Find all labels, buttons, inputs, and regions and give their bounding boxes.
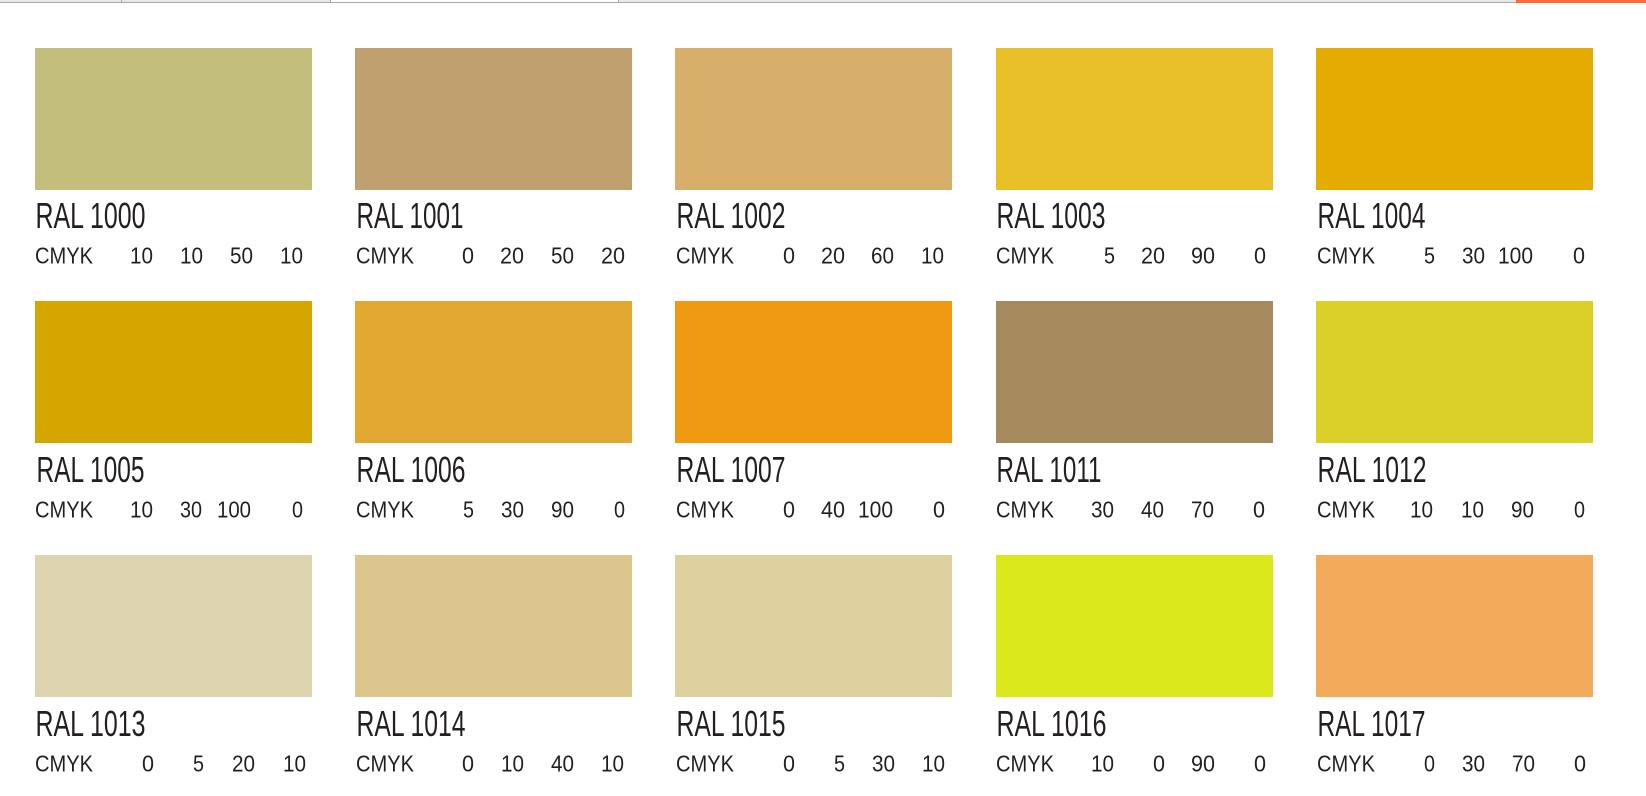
swatch: RAL 1014	[355, 555, 632, 697]
swatch: RAL 1003	[996, 48, 1273, 190]
CMYK values: RAL 1014: CMYK	[356, 751, 414, 777]
swatch: RAL 1011	[996, 301, 1273, 443]
panel: RAL 1004	[1316, 48, 1593, 269]
name: RAL 1006: RAL 1006	[356, 449, 466, 490]
CMYK values: RAL 1012: 0	[1574, 497, 1585, 523]
CMYK values: RAL 1006	[356, 497, 625, 523]
CMYK values: RAL 1006: 5	[463, 497, 474, 523]
CMYK values: RAL 1005: CMYK	[35, 497, 93, 523]
CMYK values: RAL 1011: 70	[1191, 497, 1214, 523]
CMYK values: RAL 1007: 0	[933, 497, 945, 523]
CMYK values: RAL 1012: 90	[1511, 497, 1534, 523]
CMYK values: RAL 1000: 10	[130, 243, 153, 269]
name: RAL 1000: RAL 1000	[36, 195, 146, 236]
CMYK values: RAL 1006: 0	[614, 497, 625, 523]
CMYK values: RAL 1003: 5	[1104, 243, 1115, 269]
CMYK values: RAL 1000: CMYK	[35, 243, 93, 269]
CMYK values: RAL 1006: CMYK	[356, 497, 414, 523]
CMYK values: RAL 1015: 5	[834, 751, 845, 777]
name: RAL 1016: RAL 1016	[996, 703, 1106, 744]
CMYK values: RAL 1017: CMYK	[1317, 751, 1375, 777]
CMYK values: RAL 1001: 0	[462, 243, 474, 269]
name: RAL 1004: RAL 1004	[1318, 195, 1426, 236]
panel: RAL 1006	[355, 301, 632, 523]
swatch: RAL 1017	[1316, 555, 1593, 697]
CMYK values: RAL 1003: 90	[1191, 243, 1215, 269]
panel: RAL 1015	[675, 555, 952, 777]
CMYK values: RAL 1002: 20	[821, 243, 845, 269]
CMYK values: RAL 1007: 0	[783, 497, 795, 523]
panel: RAL 1000	[35, 48, 312, 269]
name: RAL 1002: RAL 1002	[676, 195, 786, 236]
CMYK values: RAL 1011: CMYK	[996, 497, 1054, 523]
panel: RAL 1001	[355, 48, 632, 269]
CMYK values: RAL 1001: CMYK	[356, 243, 414, 269]
name: RAL 1007: RAL 1007	[676, 449, 786, 490]
CMYK values: RAL 1007: 40	[821, 497, 845, 523]
CMYK values: RAL 1007: 100	[858, 497, 893, 523]
CMYK values: RAL 1012: CMYK	[1317, 497, 1375, 523]
CMYK values: RAL 1016: 0	[1254, 751, 1266, 777]
swatch: RAL 1000	[35, 48, 312, 190]
swatch: RAL 1015	[675, 555, 952, 697]
CMYK values: RAL 1003	[996, 243, 1266, 269]
name: RAL 1003: RAL 1003	[996, 195, 1106, 236]
CMYK values: RAL 1017: 70	[1512, 751, 1535, 777]
CMYK values: RAL 1007	[676, 497, 945, 523]
CMYK values: RAL 1006: 30	[501, 497, 524, 523]
swatch: RAL 1005	[35, 301, 312, 443]
CMYK values: RAL 1000: 10	[280, 243, 303, 269]
CMYK values: RAL 1014: 0	[462, 751, 474, 777]
panel: RAL 1003	[996, 48, 1273, 269]
CMYK values: RAL 1002: 10	[921, 243, 944, 269]
CMYK values: RAL 1015: 0	[783, 751, 795, 777]
swatch: RAL 1013	[35, 555, 312, 697]
panel: RAL 1012	[1316, 301, 1593, 523]
CMYK values: RAL 1002: CMYK	[676, 243, 734, 269]
CMYK values: RAL 1011	[996, 497, 1265, 523]
CMYK values: RAL 1005: 100	[217, 497, 251, 523]
panel: RAL 1002	[675, 48, 952, 269]
CMYK values: RAL 1004	[1317, 243, 1585, 269]
CMYK values: RAL 1004: 30	[1462, 243, 1485, 269]
CMYK values: RAL 1003: 20	[1141, 243, 1165, 269]
CMYK values: RAL 1013: 20	[232, 751, 255, 777]
name: RAL 1013: RAL 1013	[36, 703, 146, 744]
CMYK values: RAL 1013: 10	[283, 751, 306, 777]
CMYK values: RAL 1003: CMYK	[996, 243, 1054, 269]
swatch: RAL 1001	[355, 48, 632, 190]
name: RAL 1014: RAL 1014	[356, 703, 466, 744]
panel: RAL 1017	[1316, 555, 1593, 777]
CMYK values: RAL 1015	[676, 751, 945, 777]
CMYK values: RAL 1013: CMYK	[35, 751, 93, 777]
CMYK values: RAL 1004: 100	[1498, 243, 1533, 269]
CMYK values: RAL 1016: 10	[1091, 751, 1114, 777]
CMYK values: RAL 1014: 10	[501, 751, 524, 777]
CMYK values: RAL 1017: 0	[1424, 751, 1435, 777]
name: RAL 1012: RAL 1012	[1318, 449, 1426, 490]
panel: RAL 1016	[996, 555, 1273, 777]
name: RAL 1011: RAL 1011	[996, 449, 1102, 490]
CMYK values: RAL 1004: CMYK	[1317, 243, 1375, 269]
CMYK values: RAL 1016	[996, 751, 1266, 777]
CMYK values: RAL 1017	[1317, 751, 1586, 777]
CMYK values: RAL 1017: 30	[1462, 751, 1485, 777]
CMYK values: RAL 1004: 0	[1573, 243, 1585, 269]
CMYK values: RAL 1005: 10	[130, 497, 153, 523]
CMYK values: RAL 1000: 10	[180, 243, 203, 269]
CMYK values: RAL 1012: 10	[1410, 497, 1433, 523]
CMYK values: RAL 1005	[35, 497, 303, 523]
name: RAL 1017: RAL 1017	[1318, 703, 1426, 744]
swatch: RAL 1002	[675, 48, 952, 190]
browser tab strip	[0, 0, 1646, 3]
CMYK values: RAL 1001: 50	[551, 243, 574, 269]
swatch: RAL 1012	[1316, 301, 1593, 443]
CMYK values: RAL 1012: 10	[1461, 497, 1484, 523]
CMYK values: RAL 1002: 0	[783, 243, 795, 269]
name: RAL 1015: RAL 1015	[676, 703, 786, 744]
CMYK values: RAL 1006: 90	[551, 497, 574, 523]
CMYK values: RAL 1014	[356, 751, 624, 777]
CMYK values: RAL 1011: 40	[1141, 497, 1164, 523]
CMYK values: RAL 1005: 0	[292, 497, 303, 523]
CMYK values: RAL 1013: 0	[142, 751, 154, 777]
CMYK values: RAL 1001: 20	[500, 243, 524, 269]
swatch: RAL 1007	[675, 301, 952, 443]
CMYK values: RAL 1000	[35, 243, 303, 269]
CMYK values: RAL 1015: 30	[872, 751, 895, 777]
CMYK values: RAL 1016: 90	[1191, 751, 1215, 777]
panel: RAL 1007	[675, 301, 952, 523]
CMYK values: RAL 1017: 0	[1574, 751, 1586, 777]
CMYK values: RAL 1002	[676, 243, 944, 269]
CMYK values: RAL 1007: CMYK	[676, 497, 734, 523]
swatch: RAL 1016	[996, 555, 1273, 697]
name: RAL 1001: RAL 1001	[356, 195, 464, 236]
CMYK values: RAL 1011: 30	[1091, 497, 1114, 523]
swatch: RAL 1006	[355, 301, 632, 443]
CMYK values: RAL 1002: 60	[871, 243, 894, 269]
CMYK values: RAL 1013	[35, 751, 306, 777]
CMYK values: RAL 1011: 0	[1253, 497, 1265, 523]
swatch: RAL 1004	[1316, 48, 1593, 190]
panel: RAL 1005	[35, 301, 312, 523]
CMYK values: RAL 1015: 10	[922, 751, 945, 777]
CMYK values: RAL 1016: 0	[1153, 751, 1165, 777]
CMYK values: RAL 1012	[1317, 497, 1585, 523]
CMYK values: RAL 1014: 40	[551, 751, 574, 777]
panel: RAL 1011	[996, 301, 1273, 523]
CMYK values: RAL 1001	[356, 243, 625, 269]
CMYK values: RAL 1000: 50	[230, 243, 253, 269]
name: RAL 1005: RAL 1005	[36, 449, 144, 490]
CMYK values: RAL 1014: 10	[601, 751, 624, 777]
panel: RAL 1013	[35, 555, 312, 777]
CMYK values: RAL 1001: 20	[601, 243, 625, 269]
CMYK values: RAL 1015: CMYK	[676, 751, 734, 777]
panel: RAL 1014	[355, 555, 632, 777]
CMYK values: RAL 1005: 30	[180, 497, 202, 523]
CMYK values: RAL 1004: 5	[1424, 243, 1435, 269]
CMYK values: RAL 1013: 5	[193, 751, 204, 777]
CMYK values: RAL 1003: 0	[1254, 243, 1266, 269]
CMYK values: RAL 1016: CMYK	[996, 751, 1054, 777]
